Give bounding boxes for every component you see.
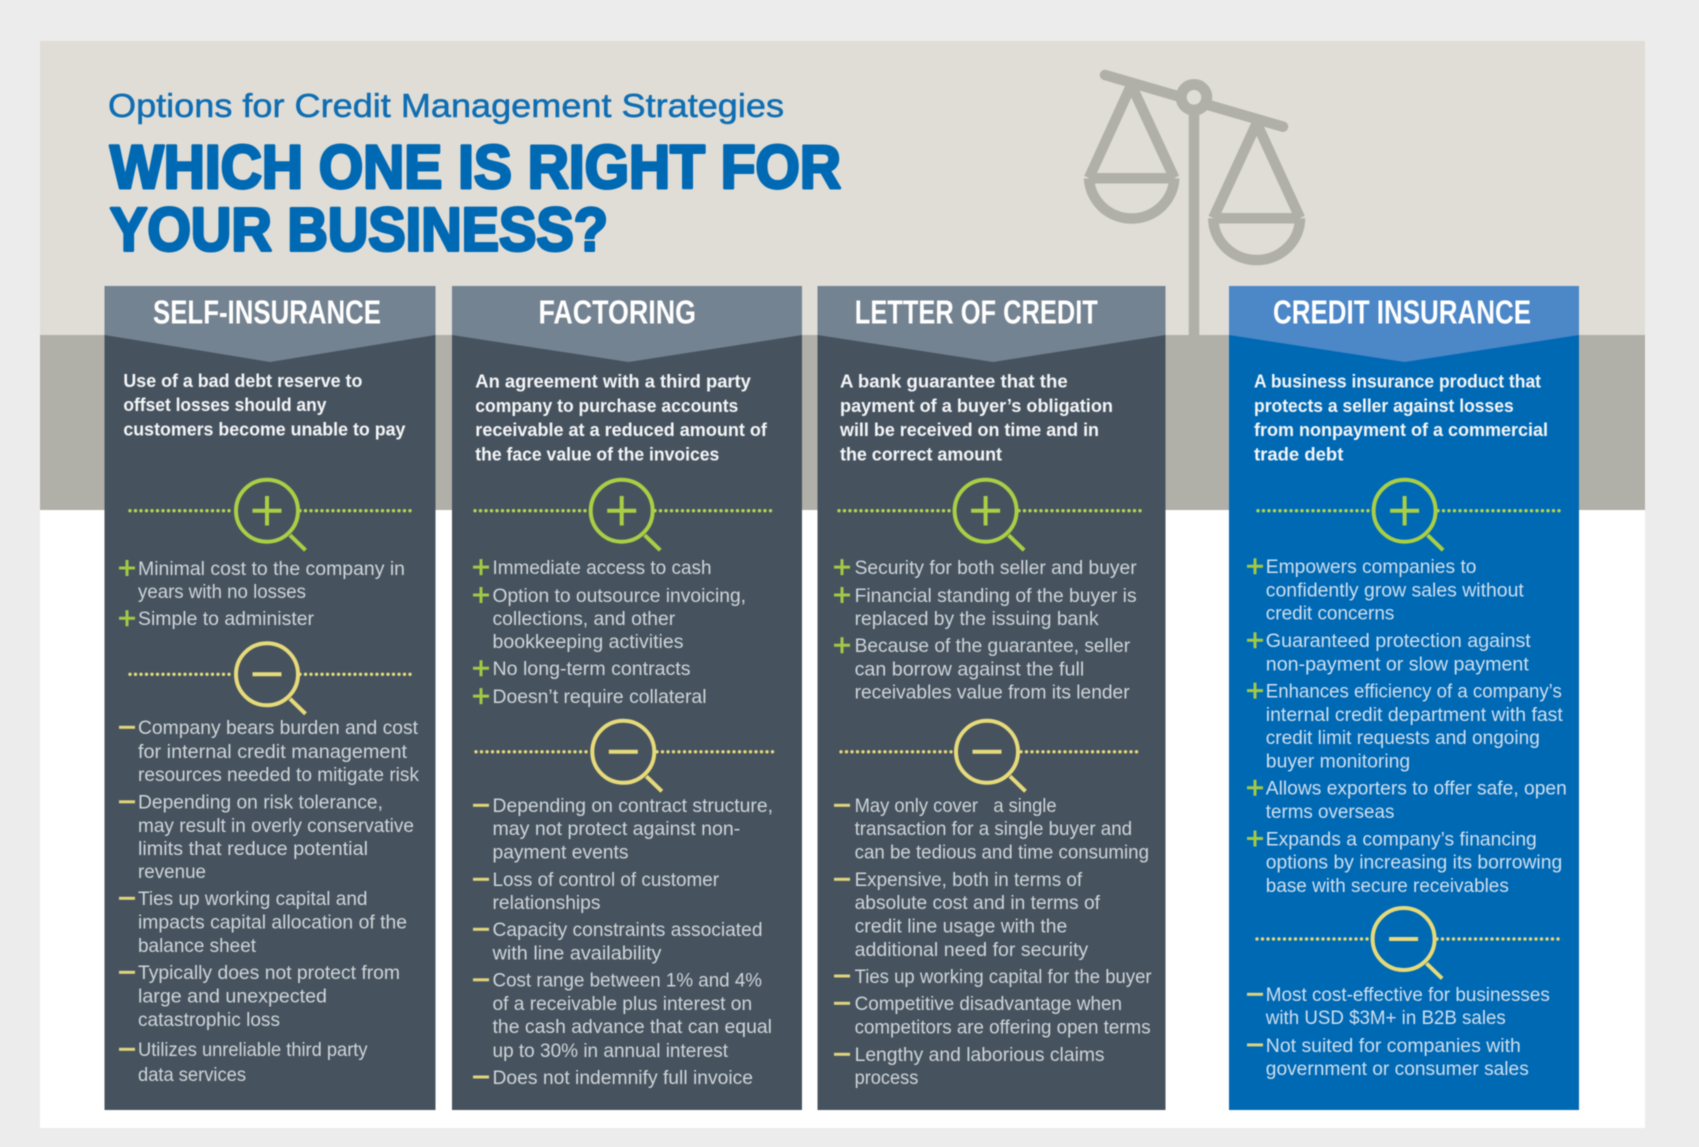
cons list: process <box>855 1067 919 1089</box>
pros list <box>834 557 1137 704</box>
cons list: credit line usage with the <box>855 915 1067 937</box>
cons list: Ties up working capital and <box>138 888 368 910</box>
title: YOUR BUSINESS? <box>110 196 608 264</box>
heading: SELF-INSURANCE <box>153 294 381 331</box>
pros list: non-payment or slow payment <box>1266 653 1529 675</box>
cons list: Company bears burden and cost <box>138 717 419 739</box>
description: protects a seller against losses <box>1254 395 1514 416</box>
icon: magnifier plus <box>839 480 1141 550</box>
heading: LETTER OF CREDIT <box>855 294 1098 331</box>
panel: factoring <box>452 286 802 1110</box>
title: WHICH ONE IS RIGHT FOR <box>110 133 841 201</box>
description: receivable at a reduced amount of <box>475 419 768 440</box>
cons list: government or consumer sales <box>1266 1058 1529 1080</box>
pros list: buyer monitoring <box>1266 751 1410 773</box>
cons list: Lengthy and laborious claims <box>855 1044 1105 1066</box>
pros list: receivables value from its lender <box>855 682 1130 704</box>
header banner <box>818 286 1166 362</box>
cons list: data services <box>138 1064 246 1086</box>
cons list: Most cost-effective for businesses <box>1266 984 1550 1006</box>
pros list: Expands a company’s financing <box>1266 828 1537 850</box>
pros list: Security for both seller and buyer <box>855 557 1137 579</box>
pros list <box>1247 556 1567 897</box>
cons list: may not protect against non- <box>492 818 740 840</box>
pros list <box>119 558 405 630</box>
panel: self-insurance <box>104 286 436 1110</box>
cons list: can be tedious and time consuming <box>855 842 1149 864</box>
cons list: balance sheet <box>138 935 257 957</box>
cons list: may result in overly conservative <box>138 815 414 837</box>
heading: FACTORING <box>538 294 696 331</box>
cons list: of a receivable plus interest on <box>492 993 752 1015</box>
cons list: catastrophic loss <box>138 1009 280 1031</box>
icon: magnifier plus <box>475 480 776 550</box>
pros list: internal credit department with fast <box>1266 704 1563 726</box>
cons list: payment events <box>492 842 629 864</box>
description: customers become unable to pay <box>123 418 406 439</box>
description <box>123 370 406 439</box>
pros list: No long-term contracts <box>492 658 691 680</box>
header banner <box>104 286 436 362</box>
cons list <box>473 795 773 1089</box>
panel: credit insurance <box>1229 286 1579 1110</box>
pros list: Minimal cost to the company in <box>138 558 405 580</box>
pros list: years with no losses <box>138 581 306 603</box>
cons list: Depending on contract structure, <box>492 795 773 817</box>
cons list: relationships <box>492 892 601 914</box>
panel: letter of credit <box>818 286 1166 1110</box>
description: the correct amount <box>840 443 1002 464</box>
cons list: Depending on risk tolerance, <box>138 792 383 814</box>
pros list: Because of the guarantee, seller <box>855 635 1131 657</box>
cons list: limits that reduce potential <box>138 838 368 860</box>
title <box>110 133 841 264</box>
pros list: Doesn’t require collateral <box>492 686 706 708</box>
pros list: options by increasing its borrowing <box>1266 852 1562 874</box>
cons list: Capacity constraints associated <box>492 919 762 941</box>
cons list: Utilizes unreliable third party <box>138 1039 368 1061</box>
description: company to purchase accounts <box>475 395 738 416</box>
cons list <box>1247 984 1550 1080</box>
cons list: Typically does not protect from <box>138 962 400 984</box>
icon: balance scale <box>1089 75 1300 335</box>
pros list: Simple to administer <box>138 608 315 630</box>
pros list: replaced by the issuing bank <box>855 608 1099 630</box>
pros list: collections, and other <box>492 608 676 630</box>
pros list: Guaranteed protection against <box>1266 630 1531 652</box>
cons list: Does not indemnify full invoice <box>492 1067 753 1089</box>
cons list: additional need for security <box>855 939 1088 961</box>
cons list: Cost range between 1% and 4% <box>492 970 762 992</box>
description <box>1254 370 1548 464</box>
cons list: with USD $3M+ in B2B sales <box>1265 1007 1506 1029</box>
description: A bank guarantee that the <box>840 370 1068 392</box>
icon: magnifier minus <box>1257 908 1559 978</box>
pros list: base with secure receivables <box>1266 875 1509 897</box>
pros list: Enhances efficiency of a company’s <box>1266 680 1562 702</box>
pros list: credit limit requests and ongoing <box>1266 727 1540 749</box>
cons list: up to 30% in annual interest <box>492 1040 729 1062</box>
pros list: Allows exporters to offer safe, open <box>1266 778 1567 800</box>
description: trade debt <box>1254 443 1343 464</box>
cons list: for internal credit management <box>138 741 408 763</box>
cons list <box>119 717 419 1086</box>
heading: CREDIT INSURANCE <box>1273 294 1531 331</box>
cons list: with line availability <box>491 943 662 965</box>
pros list: bookkeeping activities <box>492 631 684 653</box>
pros list: confidently grow sales without <box>1266 579 1524 601</box>
cons list: absolute cost and in terms of <box>855 892 1101 914</box>
subtitle: Options for Credit Management Strategies <box>108 87 784 124</box>
icon: magnifier plus <box>1258 480 1560 550</box>
description: from nonpayment of a commercial <box>1254 419 1548 440</box>
description: Use of a bad debt reserve to <box>123 370 362 391</box>
header banner <box>1229 286 1579 362</box>
cons list <box>834 795 1152 1089</box>
icon: magnifier minus <box>130 643 411 714</box>
cons list: Competitive disadvantage when <box>855 993 1122 1015</box>
cons list: transaction for a single buyer and <box>855 818 1132 840</box>
icon: magnifier minus <box>841 721 1142 791</box>
description <box>475 370 768 464</box>
pros list: Financial standing of the buyer is <box>855 585 1137 607</box>
cons list: May only cover a single <box>855 795 1057 817</box>
cons list: resources needed to mitigate risk <box>138 764 419 786</box>
icon: magnifier plus <box>130 480 412 550</box>
cons list: revenue <box>138 861 206 883</box>
icon: magnifier minus <box>476 721 778 791</box>
description <box>839 370 1113 464</box>
pros list: terms overseas <box>1266 801 1395 823</box>
pros list: Empowers companies to <box>1266 556 1477 578</box>
description: will be received on time and in <box>839 419 1099 440</box>
description: payment of a buyer’s obligation <box>840 395 1113 416</box>
cons list: Ties up working capital for the buyer <box>855 966 1152 988</box>
cons list: Expensive, both in terms of <box>855 869 1083 891</box>
cons list: large and unexpected <box>138 986 327 1008</box>
description: A business insurance product that <box>1254 370 1541 392</box>
description: offset losses should any <box>123 394 327 415</box>
pros list: Option to outsource invoicing, <box>492 585 746 607</box>
header banner <box>452 286 802 362</box>
cons list: competitors are offering open terms <box>855 1017 1151 1039</box>
description: the face value of the invoices <box>475 443 719 464</box>
cons list: Loss of control of customer <box>492 869 719 891</box>
pros list <box>473 557 746 708</box>
pros list: Immediate access to cash <box>492 557 712 579</box>
description: An agreement with a third party <box>475 370 752 392</box>
cons list: the cash advance that can equal <box>492 1016 772 1038</box>
pros list: credit concerns <box>1266 603 1395 625</box>
cons list: impacts capital allocation of the <box>138 912 407 934</box>
cons list: Not suited for companies with <box>1266 1035 1521 1057</box>
pros list: can borrow against the full <box>855 658 1084 680</box>
